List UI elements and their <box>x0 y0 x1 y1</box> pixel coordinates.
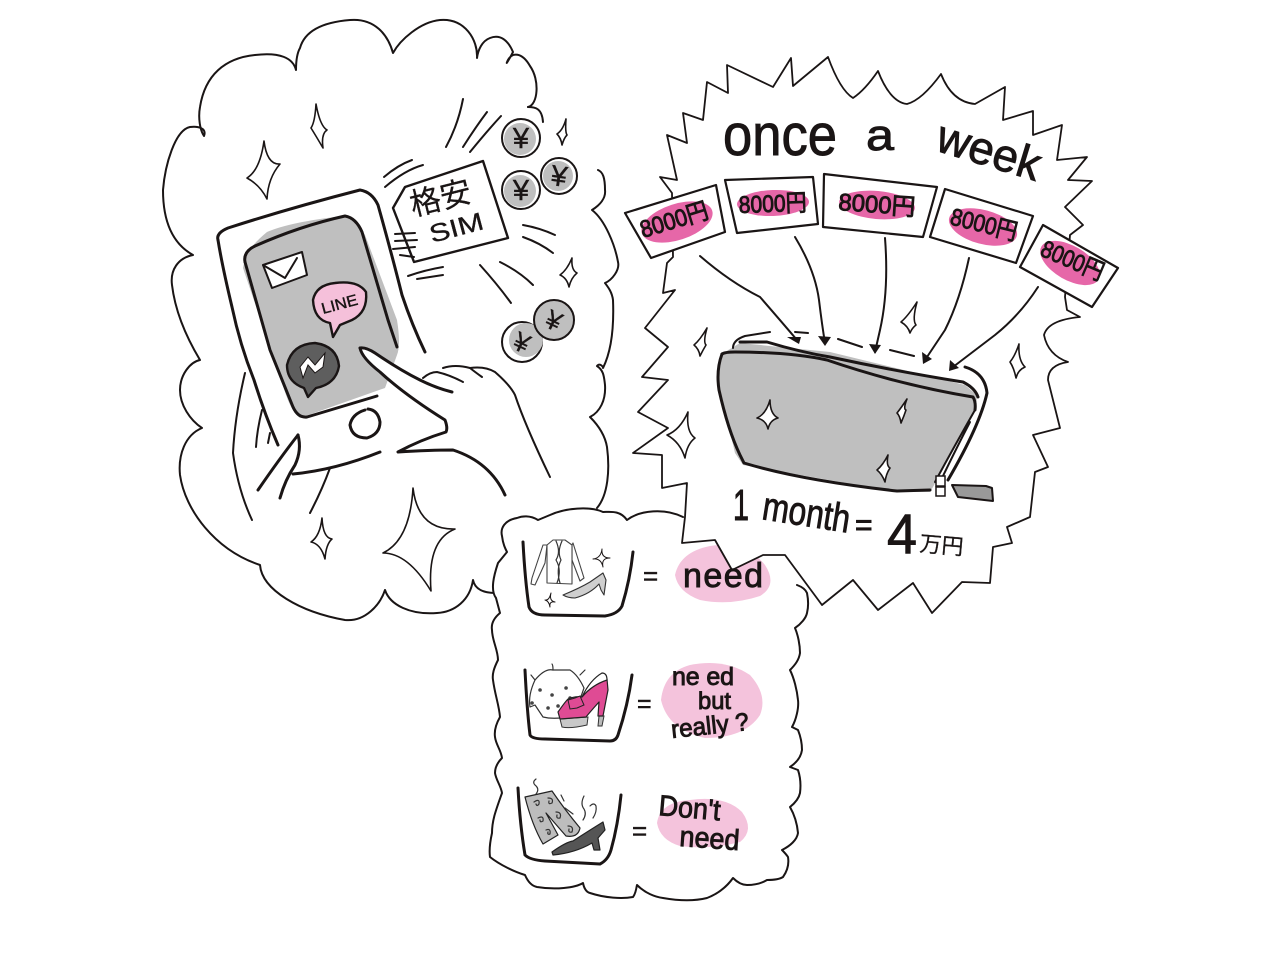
bill 4: 8000円 <box>948 204 1020 246</box>
coin: yen <box>534 300 574 340</box>
cloud outline <box>490 508 808 900</box>
sparkles <box>247 104 577 591</box>
sparkle <box>593 549 610 567</box>
wallet sparkles <box>757 399 907 482</box>
text: 1 month = 4 man yen: 1 <box>733 481 749 530</box>
equals sign: = <box>632 816 647 846</box>
coin: yen <box>541 158 577 194</box>
blouse with dots <box>530 664 585 718</box>
equals sign: = <box>637 690 652 718</box>
heading: once a week: once <box>723 103 837 168</box>
panel: closet items cloud <box>490 508 808 900</box>
phone body <box>218 190 425 474</box>
row: don't need <box>518 779 748 864</box>
row: need <box>523 540 658 616</box>
odor squiggles <box>534 779 596 820</box>
heading: once a week: week <box>930 110 1049 191</box>
bill 4 <box>930 189 1033 263</box>
phone screen <box>243 216 399 418</box>
coin: yen: ¥ <box>512 123 530 155</box>
label: need but really: really ? <box>670 708 750 744</box>
bill 3 <box>823 174 937 237</box>
SIM card: SIM <box>426 208 487 249</box>
pink platform shoe <box>558 673 608 728</box>
coin: yen: ¥ <box>540 304 568 338</box>
coin: yen <box>502 171 540 209</box>
sparkle <box>545 593 555 607</box>
burst outline <box>633 57 1092 613</box>
SIM card <box>393 161 508 262</box>
gray pump shoe <box>563 573 606 598</box>
panel: phone thought cloud <box>163 20 618 620</box>
pink blob: need <box>675 545 770 602</box>
cloud outline <box>163 20 618 620</box>
bill 5 <box>1020 225 1118 307</box>
coin: yen: ¥ <box>508 326 536 360</box>
icon: messenger bubble <box>287 343 339 397</box>
panel: once a week burst <box>625 57 1118 613</box>
text: 1 month = 4 man yen: 4 <box>887 502 917 565</box>
label: don't need: Don't <box>657 790 722 827</box>
label: don't need: need <box>679 821 741 857</box>
hand pointing <box>360 348 550 495</box>
pink blob <box>661 663 762 738</box>
text: 1 month = 4 man yen <box>733 481 965 565</box>
cup 1 <box>523 542 633 616</box>
label: don't need <box>657 790 741 857</box>
white blouse <box>531 540 584 585</box>
coin: yen: ¥ <box>548 160 570 194</box>
row: need but really <box>525 663 762 744</box>
cloud fill <box>490 508 808 900</box>
bill 1 <box>625 185 725 258</box>
gray pants <box>525 791 580 844</box>
icon: LINE bubble: LINE <box>320 292 360 318</box>
label: need but really: ne ed <box>672 663 734 691</box>
coin: yen <box>502 322 543 362</box>
pink blob <box>657 799 748 847</box>
heading: once a week <box>723 103 1049 191</box>
icon: mail <box>263 252 307 288</box>
heading: once a week: a <box>866 111 895 160</box>
text: 1 month = 4 man yen: month <box>760 484 853 542</box>
equals sign: = <box>643 561 658 591</box>
burst sparkles <box>667 302 1025 458</box>
holding hand <box>233 373 330 520</box>
label: need but really: but <box>698 688 731 715</box>
zipper pull <box>936 476 993 501</box>
text: 1 month = 4 man yen: 万円 <box>919 531 965 560</box>
bill 2: 8000円 <box>738 190 807 219</box>
text: 1 month = 4 man yen: = <box>855 509 873 542</box>
arrows to wallet <box>700 237 1038 371</box>
label: need but really <box>670 663 750 744</box>
coin: yen: ¥ <box>512 175 530 207</box>
dirty black shoe <box>552 822 605 855</box>
bill 3: 8000円 <box>838 189 916 221</box>
cup 2 <box>525 670 632 741</box>
wallet <box>718 332 993 501</box>
motion lines <box>384 99 555 303</box>
bill 5: 8000円 <box>1037 236 1108 286</box>
label: need: need <box>683 557 763 595</box>
coins <box>502 119 577 362</box>
coin: yen <box>502 119 540 157</box>
bill 2 <box>725 177 818 233</box>
icon: LINE bubble <box>313 282 366 337</box>
bill 1: 8000円 <box>637 197 712 244</box>
SIM card: 格安 <box>406 174 475 223</box>
cup 3 <box>518 788 621 864</box>
